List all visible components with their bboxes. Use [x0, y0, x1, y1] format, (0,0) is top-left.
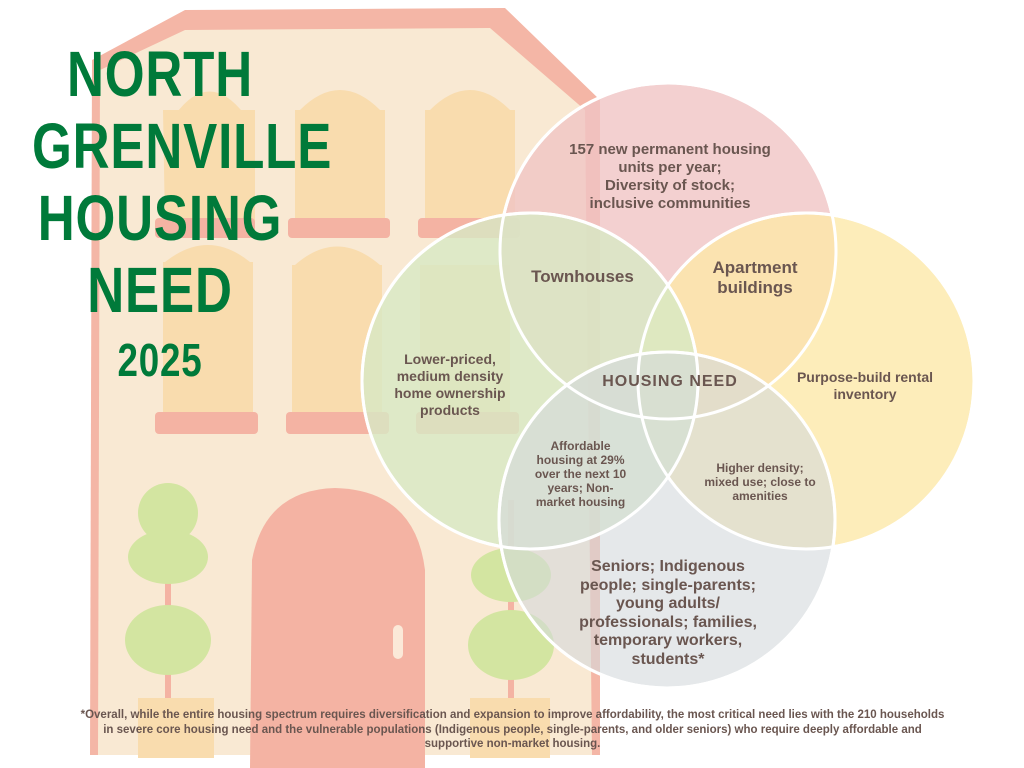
facade: [98, 28, 592, 755]
label: apartments: Apartment buildings: [712, 258, 798, 297]
title: 2025: [117, 334, 203, 386]
label: yellow: Purpose-build rental inventory: [797, 369, 933, 402]
title: GRENVILLE: [32, 110, 332, 182]
title: NEED: [87, 254, 233, 326]
label: pink: [569, 141, 771, 212]
label: higher density: Higher density; mixed use; close to amenities: [704, 461, 816, 503]
label: pink: Diversity of stock;: [605, 177, 735, 194]
circle: green left: [362, 213, 698, 549]
circle: gray bottom: [499, 352, 835, 688]
circle: yellow right: [638, 213, 974, 549]
title: HOUSING: [38, 182, 282, 254]
label: affordable: Affordable housing at 29% over the next 10 years; Non-market housing: [535, 439, 626, 509]
footnote: *Overall, while the entire housing spectrum requires diversification and expansion to improve affordability, the most critical need lies with the 210 households in severe core housing need and the vulnerable populations (Indigenous people, single-parents, and older seniors) who require deeply affordable and supportive non-market housing.: [81, 709, 944, 750]
title: NORTH: [67, 38, 253, 110]
label: pink: inclusive communities: [590, 195, 750, 212]
title: [32, 38, 332, 386]
roof outline: [90, 8, 600, 755]
label: housing need: HOUSING NEED: [602, 373, 738, 390]
label: townhouses: Townhouses: [531, 267, 634, 286]
label: pink: 157 new permanent housing units per year;: [569, 141, 771, 176]
label: gray: Seniors; Indigenous people; single-parents; young adults/ professionals; families, temporary workers, students*: [579, 558, 757, 668]
label: green: Lower-priced, medium density home ownership products: [394, 351, 506, 418]
circle: pink top: [500, 83, 836, 419]
